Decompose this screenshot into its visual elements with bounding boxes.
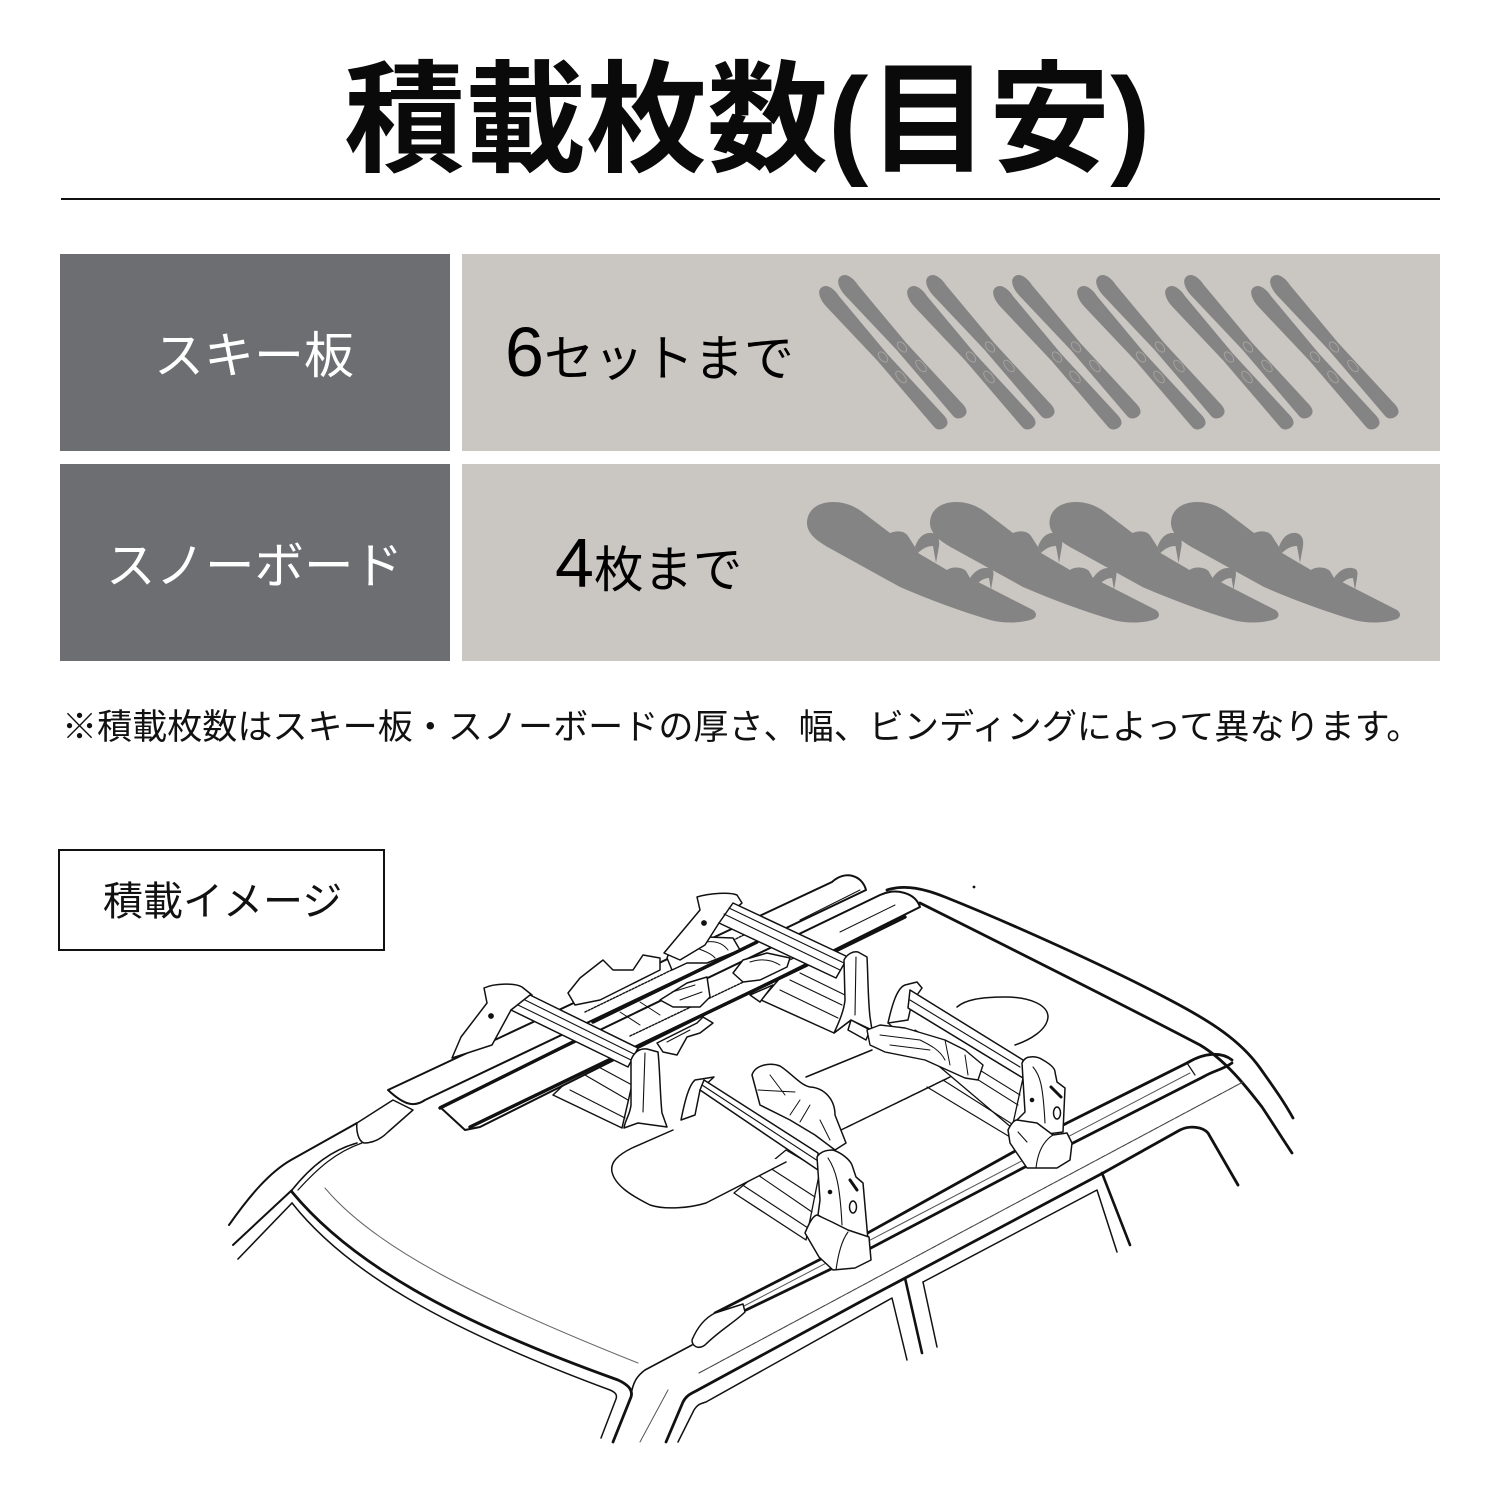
icon: snowboard 3 (1050, 502, 1278, 623)
snowboard count text: 4枚まで (555, 524, 742, 602)
icons: six pairs of skis (820, 276, 1397, 428)
icon: snowboard 4 (1171, 502, 1400, 623)
title rule (61, 198, 1440, 200)
image label text: 積載イメージ (103, 869, 342, 927)
note text: ※積載枚数はスキー板・スノーボードの厚さ、幅、ビンディングによって異なります。 (62, 699, 1421, 750)
panel: snowboard value (462, 464, 1440, 661)
snowboard binding front (752, 1064, 846, 1150)
ski carrier rear left (664, 893, 872, 1040)
ski bindings (568, 937, 807, 1055)
icon: snowboard 2 (930, 502, 1159, 623)
illustration: car roof with ski and snowboard carriers (229, 875, 1293, 1442)
icon: ski pair 1 (820, 276, 965, 428)
ski carrier front left (452, 984, 667, 1128)
panel: ski label (60, 254, 450, 451)
carrier base front left (553, 1050, 640, 1128)
snowboard shape rear (806, 997, 1048, 1130)
icon: ski pair 2 (908, 276, 1053, 428)
icon: snowboard 1 (807, 502, 1036, 623)
snowboard binding rear (867, 1025, 983, 1080)
snowboard carrier rear right (888, 982, 1072, 1168)
panel: ski value (462, 254, 1440, 451)
roof rail near side (692, 1054, 1232, 1347)
icon: ski pair 6 (1252, 276, 1397, 428)
icon: ski pair 4 (1078, 276, 1223, 428)
image label box (58, 849, 385, 951)
roof rail far side (357, 1100, 413, 1143)
carrier base rear left (761, 955, 851, 1033)
snowboard label text: スノーボード (106, 527, 403, 598)
car body: roof outline and pillars (229, 886, 1293, 1442)
title: 積載枚数(目安) (344, 52, 1151, 188)
ski count text: 6セットまで (505, 313, 794, 391)
snowboard carrier front right (681, 1077, 871, 1270)
panel: snowboard label (60, 464, 450, 661)
icons: four snowboards (807, 502, 1400, 623)
ski label text: スキー板 (154, 316, 354, 388)
snowboard shape front (612, 1130, 786, 1208)
icon: ski pair 5 (1166, 276, 1311, 428)
carrier base front right (734, 1150, 820, 1240)
icon: ski pair 3 (994, 276, 1139, 428)
skis pair (388, 875, 920, 1130)
